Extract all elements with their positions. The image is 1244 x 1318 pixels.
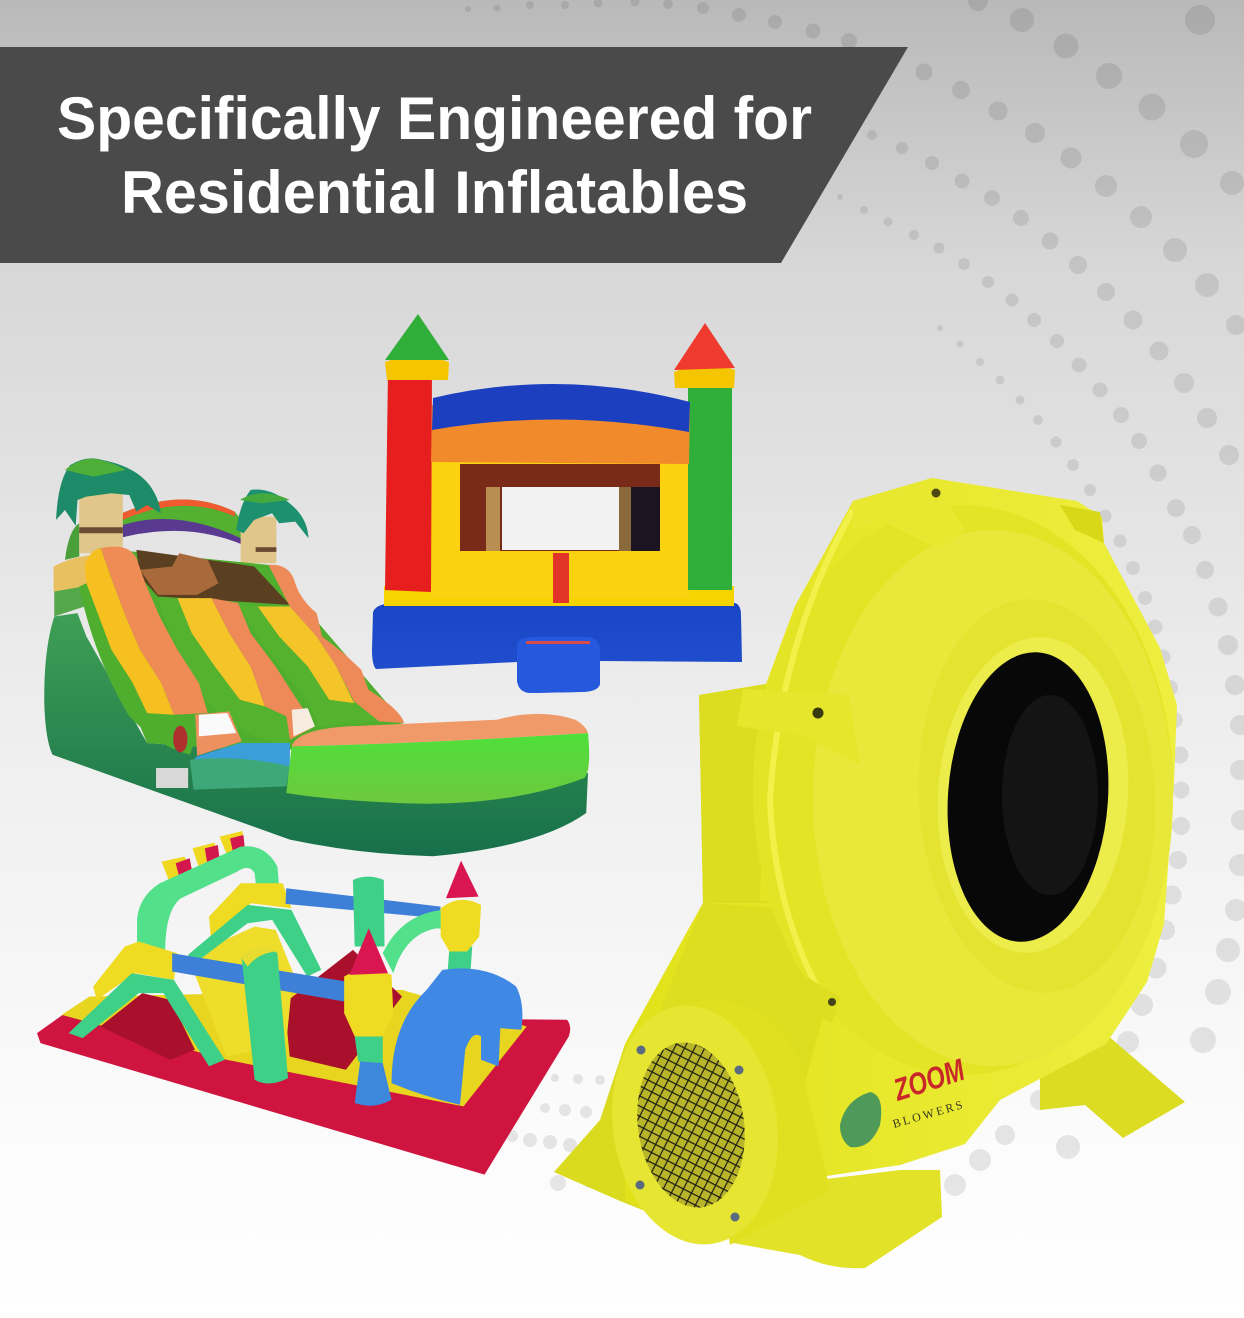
lane three	[238, 605, 379, 726]
yellow shoulders	[93, 942, 177, 1000]
red walls	[100, 993, 195, 1060]
blocks on arch	[162, 857, 192, 880]
left bracket	[737, 689, 860, 765]
yellow wall slope	[188, 927, 293, 1056]
logo: BLOWERS	[891, 1098, 964, 1131]
illustration: obstacle course	[37, 831, 570, 1175]
slide body	[44, 613, 588, 856]
green legs	[69, 973, 225, 1066]
illustration: bounce house	[372, 314, 742, 693]
palm leaves	[56, 458, 161, 526]
green posts	[353, 877, 385, 947]
blower housing	[625, 478, 1177, 1230]
outlet face	[597, 995, 793, 1255]
outlet drum	[695, 1001, 830, 1245]
front face	[813, 530, 1173, 1066]
blower feet	[1040, 1034, 1185, 1138]
slide filler	[79, 548, 404, 750]
rear rim	[753, 505, 1173, 1075]
logo	[840, 1052, 969, 1147]
lane two	[158, 598, 290, 746]
outlet mesh	[627, 1035, 755, 1215]
platform	[54, 555, 94, 592]
title text: Specifically Engineered for	[57, 85, 812, 152]
blue arches	[392, 968, 522, 1105]
yellow floor	[62, 990, 527, 1106]
raised inlet ring	[909, 593, 1165, 999]
slide top scene	[136, 550, 290, 605]
back towers and arch	[122, 500, 256, 550]
illustration: water slide	[44, 458, 589, 856]
red base	[37, 1013, 570, 1175]
neck shading	[699, 684, 775, 903]
pool wall	[286, 733, 589, 804]
small lower bracket	[793, 977, 840, 1023]
blue rails	[286, 888, 441, 918]
title banner	[0, 47, 908, 263]
pool rim	[292, 714, 588, 746]
fan grille	[1002, 695, 1098, 895]
dotted halftone pattern	[465, 0, 1244, 1196]
top bracket	[853, 478, 965, 550]
black inlet	[938, 647, 1118, 947]
water run-out	[194, 743, 290, 786]
right tower	[448, 947, 472, 972]
title text line two: Residential Inflatables	[121, 159, 748, 226]
logo: ZOOM	[889, 1052, 969, 1108]
green arch	[137, 846, 279, 953]
front tower	[355, 1030, 392, 1106]
lane one	[79, 583, 204, 755]
green curve	[383, 910, 462, 973]
top right lug	[1060, 505, 1104, 543]
illustration: yellow blower	[554, 478, 1185, 1268]
outlet screws	[636, 1046, 744, 1222]
